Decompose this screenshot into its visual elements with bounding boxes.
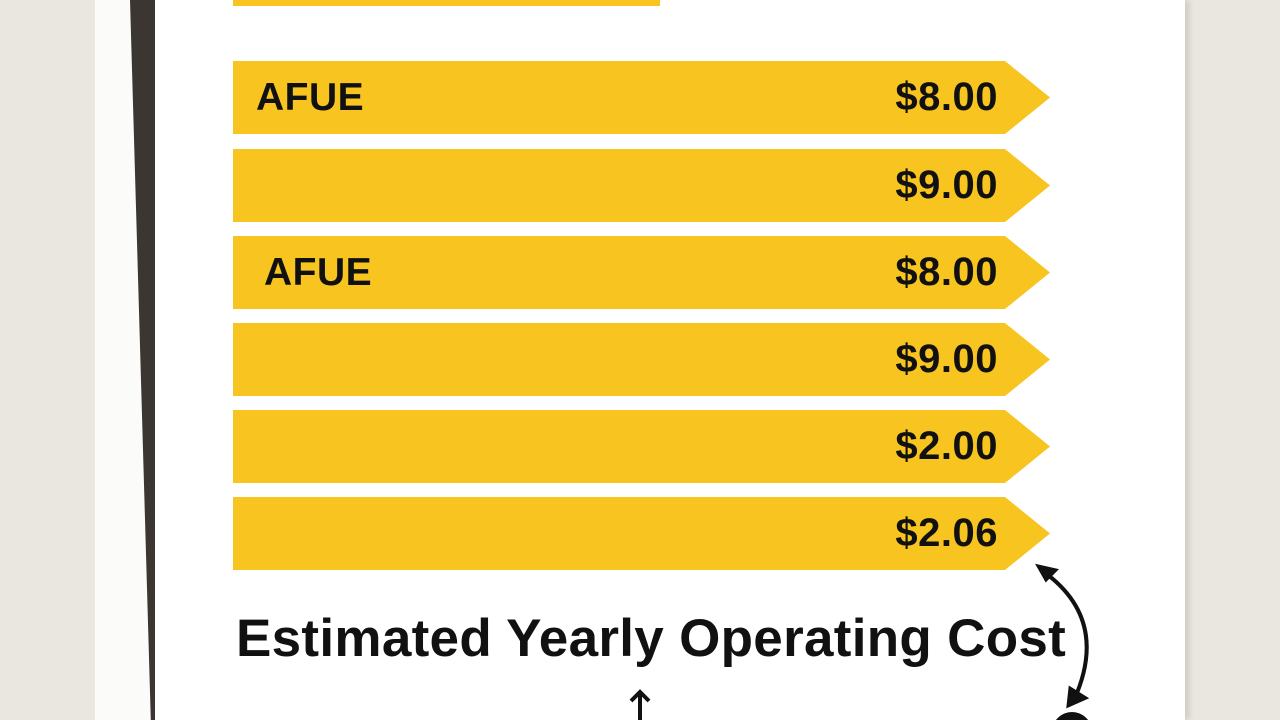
- bar 3: [233, 236, 1050, 309]
- bar 6: [233, 497, 1050, 570]
- bar 2: [233, 149, 1050, 222]
- icon: up arrow: [630, 689, 650, 720]
- bar 5: [233, 410, 1050, 483]
- bar 5: $2.00: [895, 424, 998, 468]
- title: Estimated Yearly Operating Cost: [236, 609, 1066, 668]
- bar 3: $8.00: [895, 250, 998, 294]
- bar 4: $9.00: [895, 337, 998, 381]
- back sheet: [95, 0, 155, 720]
- icon: curved double arrow: [1035, 564, 1090, 720]
- bar 2: $9.00: [895, 163, 998, 207]
- bar 3: AFUE: [264, 251, 372, 294]
- bar 6: $2.06: [895, 511, 998, 555]
- sheet dark edge: [130, 0, 156, 720]
- bar 1: AFUE: [256, 76, 364, 119]
- bar 1: $8.00: [895, 75, 998, 119]
- bar 4: [233, 323, 1050, 396]
- top partial bar: [233, 0, 660, 6]
- bar 1: [233, 61, 1050, 134]
